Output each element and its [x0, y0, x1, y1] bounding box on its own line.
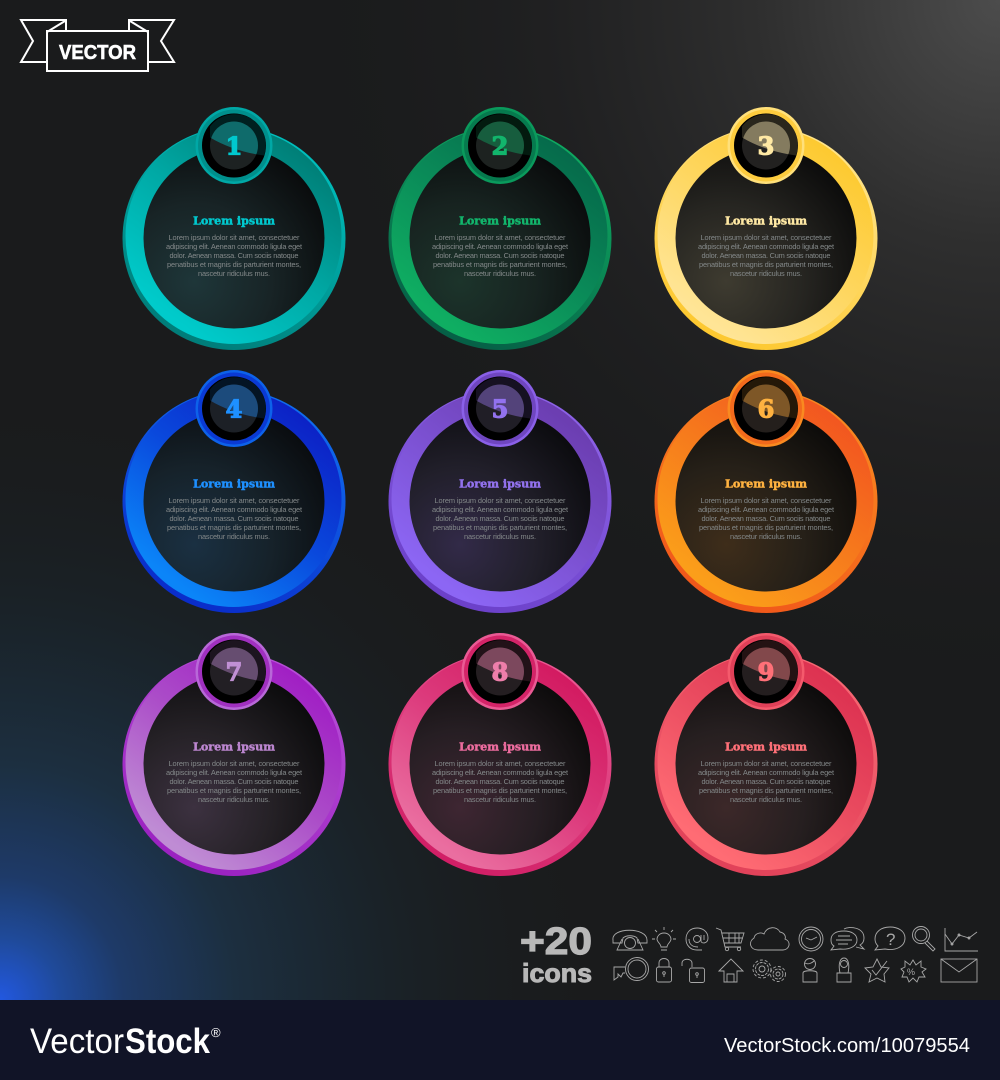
body text 4: dolor. Aenean massa. Cum sociis natoque [170, 514, 298, 523]
icon: light bulb [652, 927, 676, 950]
body text 6: penatibus et magnis dis parturient montes, [699, 523, 833, 532]
icon: woman [837, 958, 851, 982]
body text 1: adipiscing elit. Aenean commodo ligula eget [166, 242, 302, 251]
icon: clock [799, 927, 823, 951]
number badge 9 [728, 633, 804, 710]
icon: cloud [751, 928, 789, 950]
body text 3: penatibus et magnis dis parturient montes, [699, 260, 833, 269]
heading 1: Lorem ipsum [193, 214, 275, 228]
body text 3: Lorem ipsum dolor sit amet, consectetuer [700, 233, 832, 242]
body text 8: nascetur ridiculus mus. [464, 795, 536, 804]
body text 2: Lorem ipsum dolor sit amet, consectetuer [434, 233, 566, 242]
body text 3: adipiscing elit. Aenean commodo ligula eget [698, 242, 834, 251]
body text 8: penatibus et magnis dis parturient montes, [433, 786, 567, 795]
panel: item 5 [388, 370, 612, 613]
body text 7: Lorem ipsum dolor sit amet, consectetuer [168, 759, 300, 768]
text: +20 icons: icons [522, 958, 592, 988]
number badge 1 [196, 107, 272, 184]
body text 2 [432, 233, 568, 278]
icon: line chart [945, 928, 978, 951]
number badge 7 [196, 633, 272, 710]
panel: item 9 [654, 633, 878, 876]
icon: open padlock [682, 959, 704, 982]
body text 9: Lorem ipsum dolor sit amet, consectetuer [700, 759, 832, 768]
panel: item 7 [122, 633, 346, 876]
body text 4 [166, 496, 302, 541]
footer logo: ® [211, 1025, 221, 1040]
number badge 1: 1 [226, 132, 242, 160]
icon: question bubble [875, 927, 905, 950]
number badge 8 [462, 633, 538, 710]
footer logo [30, 1022, 221, 1061]
number badge 2: 2 [492, 132, 508, 160]
body text 2: adipiscing elit. Aenean commodo ligula eget [432, 242, 568, 251]
body text 4: penatibus et magnis dis parturient montes, [167, 523, 301, 532]
footer logo: Vector [30, 1022, 124, 1061]
number badge 3: 3 [758, 132, 774, 160]
body text 5: penatibus et magnis dis parturient montes, [433, 523, 567, 532]
body text 5: Lorem ipsum dolor sit amet, consectetuer [434, 496, 566, 505]
icon: star with check [865, 959, 889, 982]
body text 7: nascetur ridiculus mus. [198, 795, 270, 804]
panel: item 8 [388, 633, 612, 876]
number badge 4: 4 [226, 394, 242, 424]
body text 9: dolor. Aenean massa. Cum sociis natoque [702, 777, 830, 786]
text: +20 icons [520, 921, 592, 988]
body text 5 [432, 496, 568, 541]
body text 2: nascetur ridiculus mus. [464, 269, 536, 278]
text: +20 icons: +20 [520, 921, 592, 963]
panel: item 3 [654, 107, 878, 350]
body text 2: penatibus et magnis dis parturient montes, [433, 260, 567, 269]
body text 9: adipiscing elit. Aenean commodo ligula eget [698, 768, 834, 777]
body text 6: adipiscing elit. Aenean commodo ligula eget [698, 505, 834, 514]
icon: discount burst: % [907, 967, 915, 977]
panel: item 2 [388, 107, 612, 350]
body text 1: Lorem ipsum dolor sit amet, consectetuer [168, 233, 300, 242]
body text 3: nascetur ridiculus mus. [730, 269, 802, 278]
panel: item 1 [122, 107, 346, 350]
body text 2: dolor. Aenean massa. Cum sociis natoque [436, 251, 564, 260]
number badge 8: 8 [492, 658, 508, 686]
icon: magnifier [912, 926, 935, 951]
icon: discount burst [901, 960, 926, 982]
icon: envelope [941, 959, 977, 982]
icon: house [719, 959, 743, 982]
icon: man [803, 958, 817, 982]
body text 1: dolor. Aenean massa. Cum sociis natoque [170, 251, 298, 260]
heading 4: Lorem ipsum [193, 478, 275, 490]
icon set [613, 926, 978, 982]
icon: question bubble: ? [886, 930, 895, 949]
number badge 2 [462, 107, 538, 184]
body text 8: dolor. Aenean massa. Cum sociis natoque [436, 777, 564, 786]
body text 6: nascetur ridiculus mus. [730, 532, 802, 541]
heading 2: Lorem ipsum [459, 214, 541, 228]
body text 6: Lorem ipsum dolor sit amet, consectetuer [700, 496, 832, 505]
number badge 6 [728, 370, 804, 447]
footer band [0, 1000, 1000, 1080]
heading 9: Lorem ipsum [725, 740, 807, 754]
icon: speech bubbles [831, 928, 864, 950]
body text 3 [698, 233, 834, 278]
number badge 6: 6 [758, 394, 774, 424]
body text 5: nascetur ridiculus mus. [464, 532, 536, 541]
body text 8: adipiscing elit. Aenean commodo ligula eget [432, 768, 568, 777]
body text 4: Lorem ipsum dolor sit amet, consectetuer [168, 496, 300, 505]
body text 1: penatibus et magnis dis parturient montes, [167, 260, 301, 269]
body text 5: dolor. Aenean massa. Cum sociis natoque [436, 514, 564, 523]
number badge 4 [196, 370, 272, 447]
number badge 5 [462, 370, 538, 447]
ribbon badge: VECTOR [21, 20, 174, 71]
body text 7 [166, 759, 302, 804]
number badge 5: 5 [492, 394, 508, 424]
heading 3: Lorem ipsum [725, 214, 807, 228]
heading 8: Lorem ipsum [459, 740, 541, 754]
body text 6: dolor. Aenean massa. Cum sociis natoque [702, 514, 830, 523]
panel: item 4 [122, 370, 346, 613]
body text 4: adipiscing elit. Aenean commodo ligula eget [166, 505, 302, 514]
body text 1: nascetur ridiculus mus. [198, 269, 270, 278]
icon: shopping cart [716, 928, 744, 951]
body text 7: dolor. Aenean massa. Cum sociis natoque [170, 777, 298, 786]
body text 8 [432, 759, 568, 804]
body text 9 [698, 759, 834, 804]
body text 3: dolor. Aenean massa. Cum sociis natoque [702, 251, 830, 260]
footer image id: VectorStock.com/10079554 [724, 1035, 970, 1057]
body text 7: adipiscing elit. Aenean commodo ligula eget [166, 768, 302, 777]
number badge 9: 9 [758, 658, 774, 686]
number badge 7: 7 [226, 658, 242, 686]
body text 1 [166, 233, 302, 278]
heading 7: Lorem ipsum [193, 740, 275, 754]
body text 6 [698, 496, 834, 541]
heading 6: Lorem ipsum [725, 478, 807, 490]
icon: gears [753, 960, 786, 982]
footer logo: Stock [125, 1022, 210, 1061]
ribbon badge: VECTOR: VECTOR [59, 42, 137, 64]
heading 5: Lorem ipsum [459, 478, 541, 490]
icon: telephone [613, 930, 647, 950]
body text 9: penatibus et magnis dis parturient montes, [699, 786, 833, 795]
panel: item 6 [654, 370, 878, 613]
body text 8: Lorem ipsum dolor sit amet, consectetuer [434, 759, 566, 768]
body text 7: penatibus et magnis dis parturient montes, [167, 786, 301, 795]
number badge 3 [728, 107, 804, 184]
body text 9: nascetur ridiculus mus. [730, 795, 802, 804]
body text 4: nascetur ridiculus mus. [198, 532, 270, 541]
icon: at sign [686, 928, 708, 950]
icon: key [614, 958, 648, 980]
icon: closed padlock [656, 958, 672, 982]
body text 5: adipiscing elit. Aenean commodo ligula eget [432, 505, 568, 514]
